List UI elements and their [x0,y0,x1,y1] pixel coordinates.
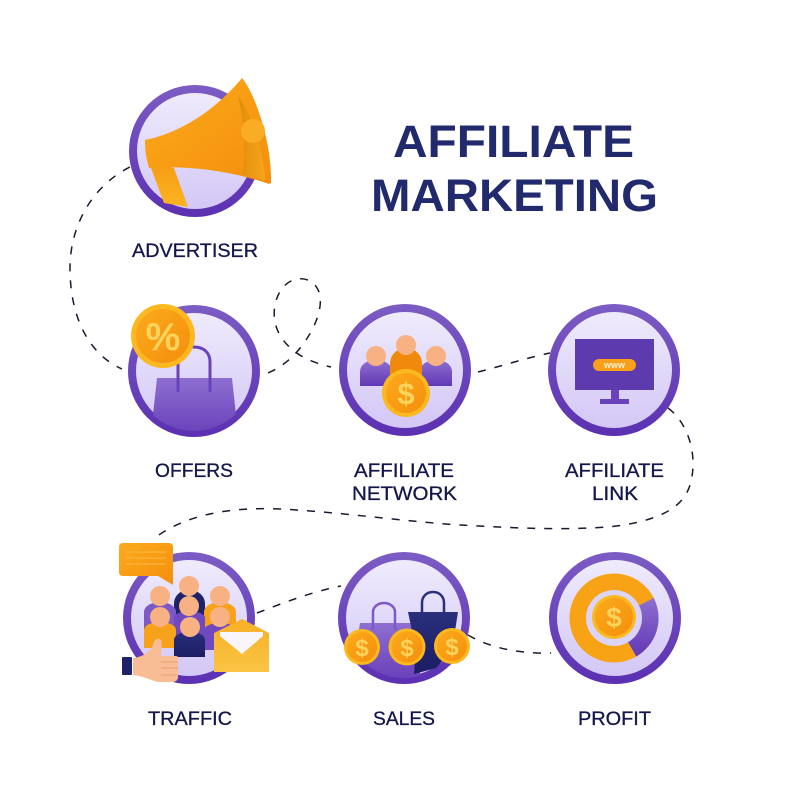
panel: sales [338,552,470,730]
icon: coin 3 [434,628,470,664]
icon: crowd of people [144,576,236,657]
dashed connector: offers to affiliate network with loop [268,279,331,373]
donut chart [570,574,659,662]
dashed connector: traffic to sales [257,586,341,613]
icon: coin 2 [388,628,426,666]
panel: traffic [119,543,269,730]
icon: coin 2: $ [400,635,414,662]
title [371,116,658,221]
advertiser circle [129,85,261,217]
panel: advertiser [129,78,271,262]
icon: coin 3: $ [445,634,459,661]
label: offers: OFFERS [155,461,233,482]
icon: monitor: www [603,360,626,370]
sales circle [338,552,470,684]
icon: dark shopping bag [408,592,458,674]
icon: dollar coin [592,595,636,639]
link circle [548,304,680,436]
dashed connector: affiliate network to affiliate link [478,353,550,372]
icon: light shopping bag [359,602,420,678]
icon: thumbs up [122,639,178,682]
title: AFFILIATE [393,116,634,167]
title: MARKETING [371,170,658,221]
icon: percent coin: % [146,316,180,359]
panel: profit [549,552,681,730]
dashed connector: affiliate link to traffic [152,408,693,540]
icon: dollar coin: $ [606,602,622,633]
panel: offers [128,304,260,482]
traffic circle [123,552,255,684]
panel: affiliate network [339,304,471,505]
label: advertiser: ADVERTISER [132,241,258,262]
label: affiliate link: LINK [592,484,638,505]
icon: coin 1: $ [355,635,369,662]
icon: envelope [214,619,269,672]
label: traffic: TRAFFIC [148,709,232,730]
icon: group of people [360,335,452,386]
network circle [339,304,471,436]
icon: coin 1 [344,629,380,665]
label: sales: SALES [373,709,435,730]
dashed connector: sales to profit [468,635,551,653]
icon: speech bubble [119,543,173,585]
icon: percent coin [131,304,195,368]
panel: affiliate link [548,304,680,505]
profit circle [549,552,681,684]
icon: dollar coin [382,369,430,417]
label: affiliate link [565,461,664,505]
icon: megaphone [145,78,271,207]
label: affiliate network [352,461,457,505]
icon: monitor [575,339,654,404]
icon: shopping bag [153,346,236,431]
offers circle [128,305,260,437]
dashed connector: advertiser to offers [70,167,130,369]
icon: dollar coin: $ [397,376,415,411]
label: profit: PROFIT [578,709,651,730]
label: affiliate network: NETWORK [352,484,457,505]
label: affiliate link: AFFILIATE [565,461,664,482]
label: affiliate network: AFFILIATE [354,461,454,482]
